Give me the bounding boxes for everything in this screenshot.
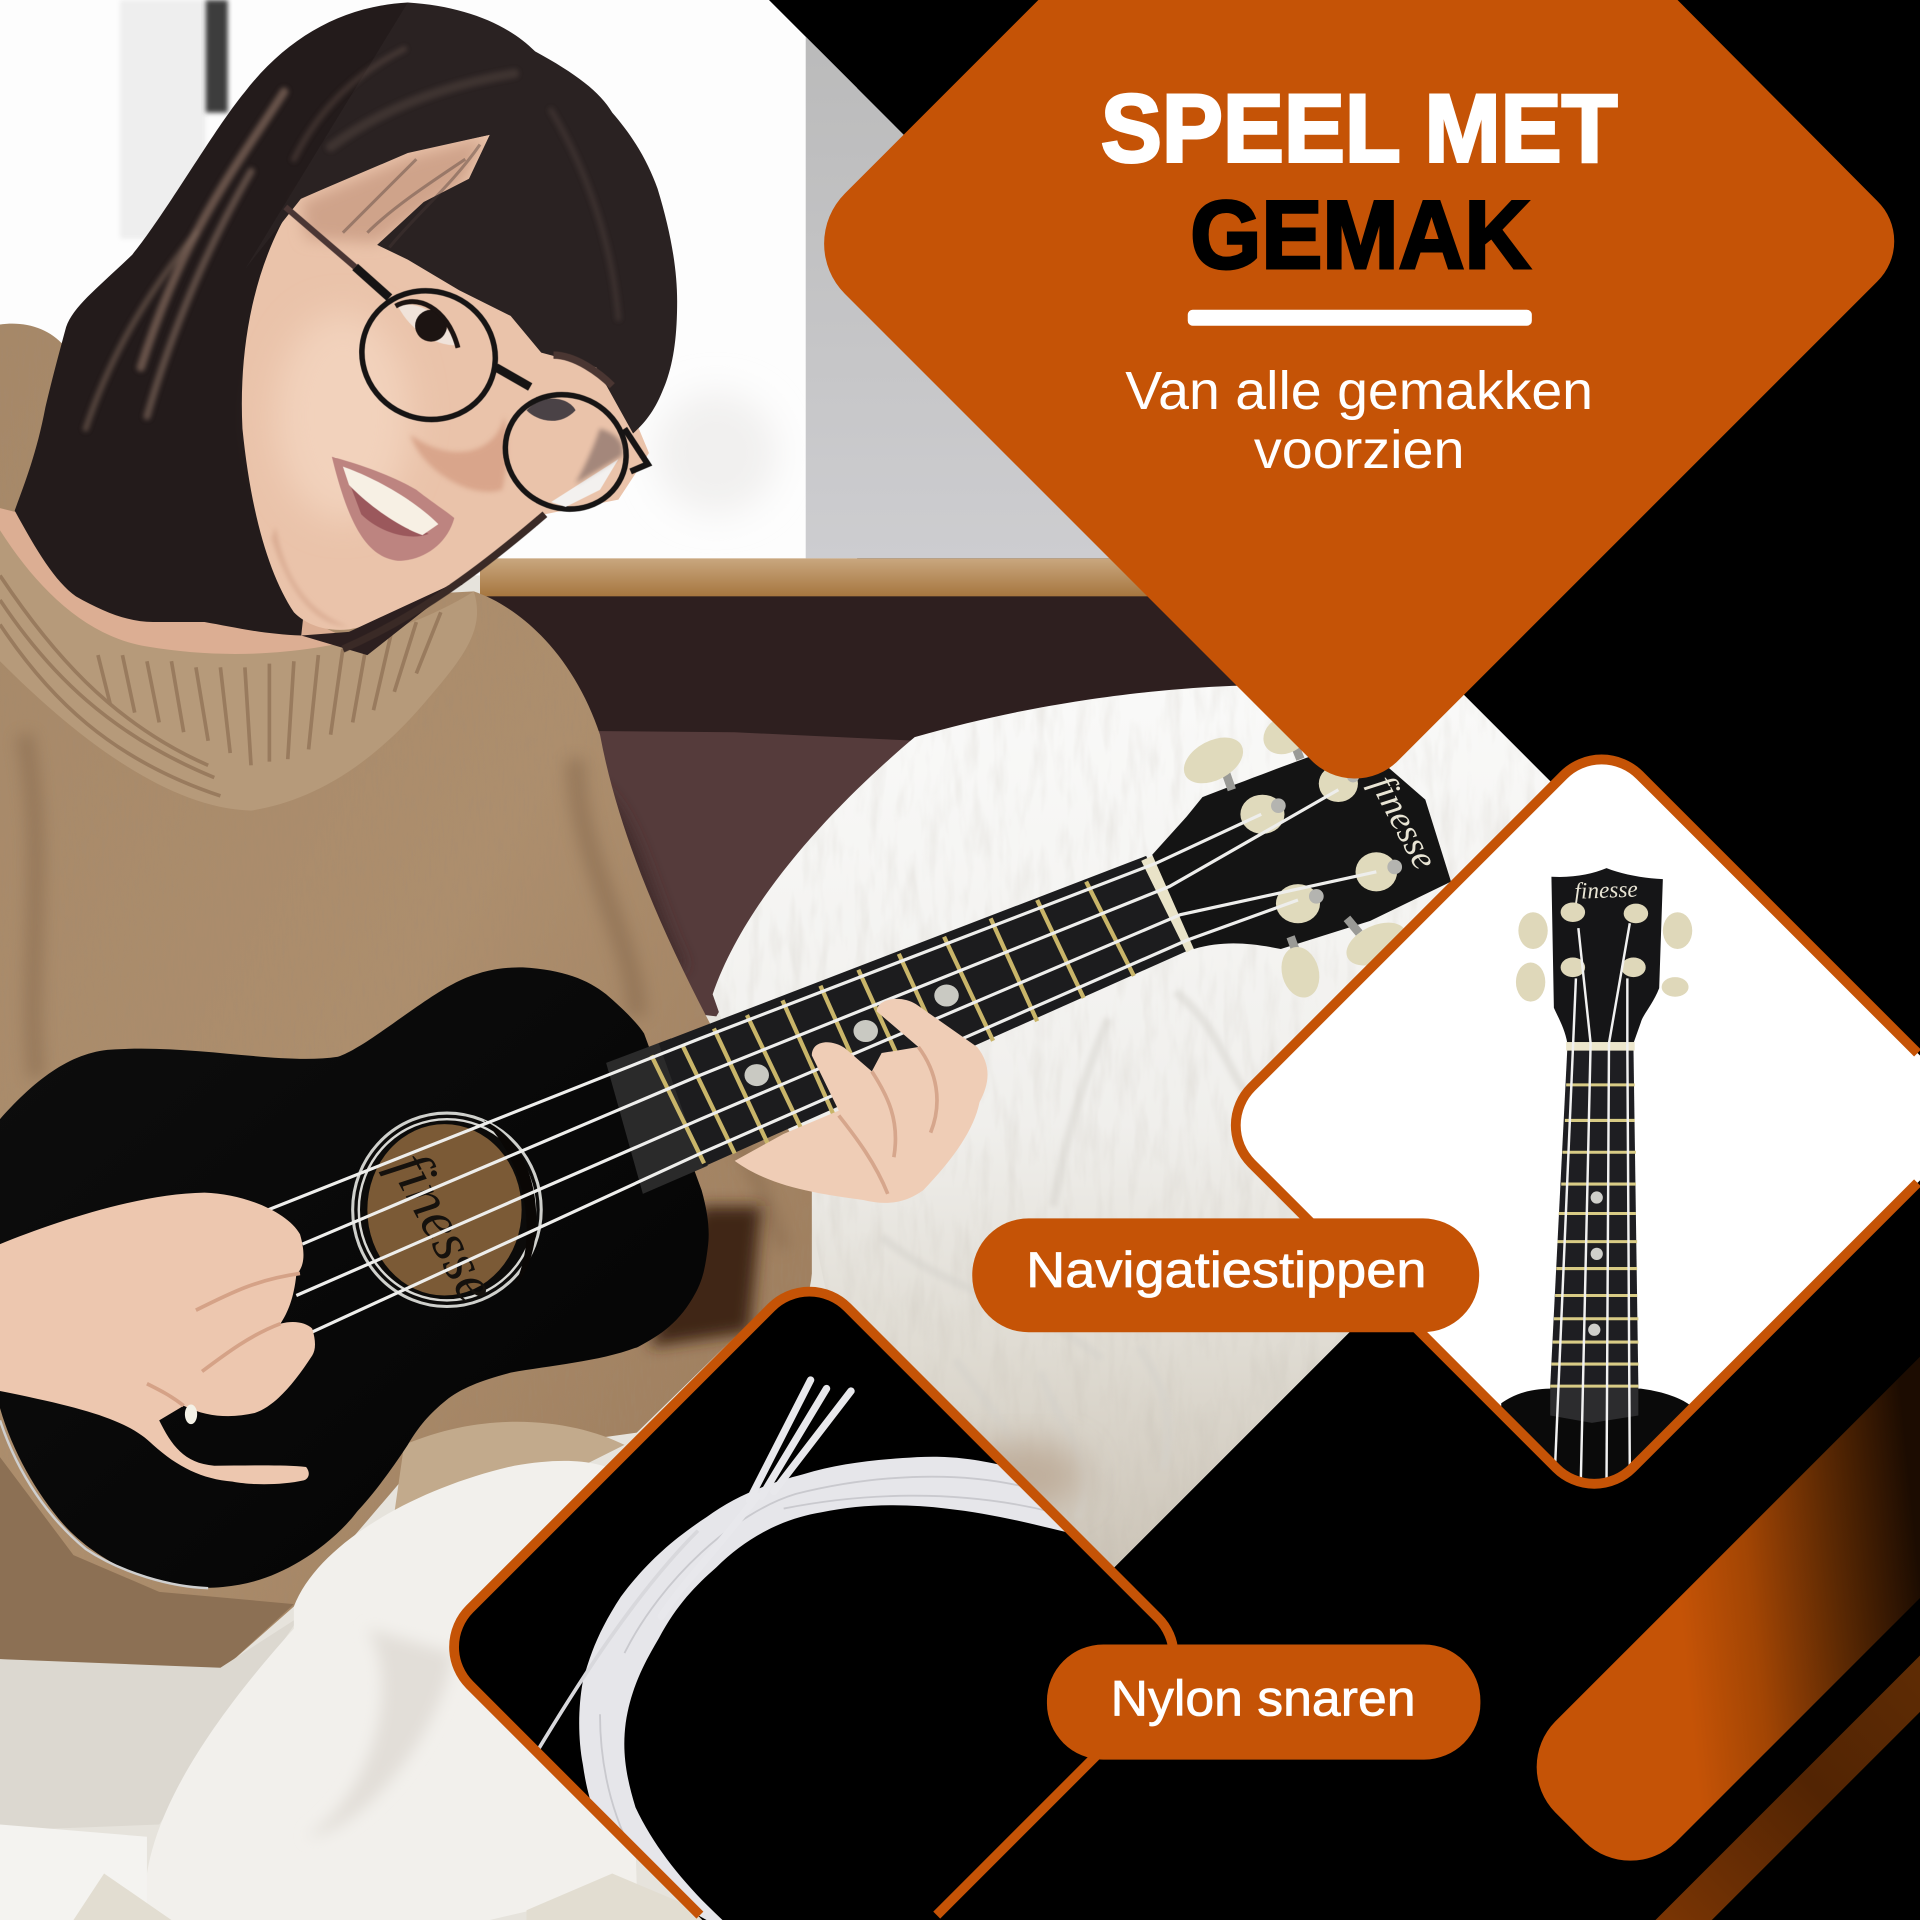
neck shadow on jaw bbox=[301, 578, 465, 655]
decorative gradient stripe thin bbox=[1656, 1656, 1920, 1920]
small nut bbox=[1566, 1042, 1635, 1051]
lens hair shadow bbox=[576, 429, 623, 484]
neck bbox=[0, 508, 367, 667]
dark window post bbox=[206, 0, 228, 113]
small ukulele bbox=[1501, 868, 1692, 1500]
strumming hand bbox=[0, 1193, 315, 1484]
floor fabric bbox=[0, 1824, 147, 1920]
nose shadow bbox=[410, 416, 507, 492]
left trouser leg bbox=[0, 1616, 300, 1831]
soundhole label bbox=[367, 1124, 522, 1296]
dark panel bbox=[486, 596, 1237, 740]
small headstock bbox=[1551, 868, 1663, 1043]
forehead shade bbox=[301, 137, 485, 242]
clear pickguard bbox=[606, 1038, 708, 1194]
window background bbox=[0, 0, 857, 576]
fretboard bbox=[651, 855, 1199, 1167]
small tuning buttons bbox=[1516, 902, 1692, 1002]
label pill: nylon snaren: Nylon snaren bbox=[1111, 1671, 1416, 1727]
subtitle: Van alle gemakken bbox=[1125, 361, 1593, 421]
blanket folds bbox=[885, 990, 1246, 1268]
strings bbox=[242, 790, 1376, 1364]
position dots bbox=[744, 1064, 769, 1086]
decorative gradient stripe large bbox=[1537, 1357, 1920, 1861]
label pill: navigatiestippen: Navigatiestippen bbox=[1026, 1242, 1427, 1298]
eyes bbox=[396, 302, 576, 421]
lens reflection bbox=[551, 459, 618, 507]
sweater bbox=[0, 324, 812, 1671]
wooden shelf bbox=[480, 558, 1166, 596]
fretting hand bbox=[735, 999, 988, 1203]
small fretboard bbox=[1550, 1048, 1638, 1386]
peg shafts bbox=[1224, 741, 1359, 950]
headstock bbox=[1152, 708, 1451, 1002]
subtitle line 2: voorzien bbox=[1254, 420, 1464, 480]
window haze bbox=[662, 398, 771, 508]
ukulele body bbox=[0, 967, 709, 1588]
knit throw bbox=[73, 1873, 722, 1920]
soundhole shadow bbox=[484, 1120, 536, 1286]
hair fringe bbox=[245, 2, 677, 433]
knuckle shading bbox=[839, 1047, 937, 1194]
coil strand lines bbox=[600, 1477, 1053, 1861]
grey wall bbox=[806, 36, 1110, 558]
turtleneck collar bbox=[0, 530, 477, 811]
blanket fur texture bbox=[718, 686, 1534, 1313]
panel: nylon strings diamond bbox=[454, 1292, 1174, 1920]
label pill: navigatiestippen bbox=[972, 1218, 1479, 1332]
label pill: nylon snaren bbox=[1047, 1644, 1480, 1760]
sweater shadow behind ukulele bbox=[649, 1206, 762, 1347]
sofa cushion bbox=[598, 731, 910, 1016]
white blanket bbox=[712, 686, 1550, 1568]
frets bbox=[651, 882, 1134, 1163]
soundhole rings bbox=[353, 1113, 541, 1307]
headstock logo: finesse bbox=[1363, 768, 1446, 876]
sweater folds bbox=[24, 735, 784, 1249]
label brand text: finesse bbox=[378, 1141, 510, 1313]
divider bar bbox=[1188, 310, 1532, 326]
ukulele edge binding bbox=[0, 1420, 208, 1588]
peg posts bbox=[1271, 770, 1402, 904]
sweater lower left shade bbox=[0, 1457, 294, 1671]
jaw shade bbox=[272, 527, 349, 627]
small body bbox=[1501, 1389, 1691, 1500]
cheek light bbox=[276, 312, 410, 520]
back of hair bbox=[15, 2, 490, 636]
glasses bbox=[285, 207, 648, 529]
mouth bbox=[332, 457, 454, 561]
window frame band bbox=[120, 0, 206, 239]
diamond orange outline bbox=[454, 1292, 1174, 1915]
small frets bbox=[1550, 1085, 1638, 1386]
small dots bbox=[1591, 1191, 1603, 1204]
panel: fretboard detail diamond bbox=[1236, 759, 1920, 1500]
panel: orange headline diamond bbox=[824, 0, 1894, 779]
small strings bbox=[1555, 923, 1630, 1480]
nut bbox=[1141, 855, 1199, 953]
diamond orange outline bbox=[1236, 759, 1918, 1484]
small logo: finesse bbox=[1574, 877, 1638, 905]
finger creases bbox=[147, 1273, 300, 1406]
tuning pegs bbox=[1176, 708, 1413, 1002]
blanket beige patch bbox=[961, 1441, 1084, 1510]
nylon string coil bbox=[535, 1380, 1078, 1920]
sweater lower fold bbox=[394, 1422, 624, 1510]
title line 1: SPEEL MET bbox=[1101, 75, 1618, 183]
trouser shadow bbox=[306, 1629, 453, 1837]
sweater knit texture bbox=[0, 324, 812, 1671]
thin trailing strand bbox=[535, 1531, 698, 1755]
fringe strands on forehead bbox=[343, 144, 480, 247]
cushion shadow bbox=[616, 801, 684, 967]
string loose ends bbox=[661, 1380, 851, 1616]
stray hair strand bbox=[343, 514, 545, 649]
photo base bbox=[0, 576, 1550, 1920]
small pickguard bbox=[1550, 1386, 1638, 1423]
hair highlights bbox=[86, 49, 618, 429]
white trousers bbox=[145, 1461, 637, 1920]
title line 2: GEMAK bbox=[1190, 181, 1531, 289]
ukulele pick bbox=[185, 1404, 197, 1424]
face bbox=[242, 135, 649, 630]
eyebrow hint bbox=[553, 355, 612, 386]
